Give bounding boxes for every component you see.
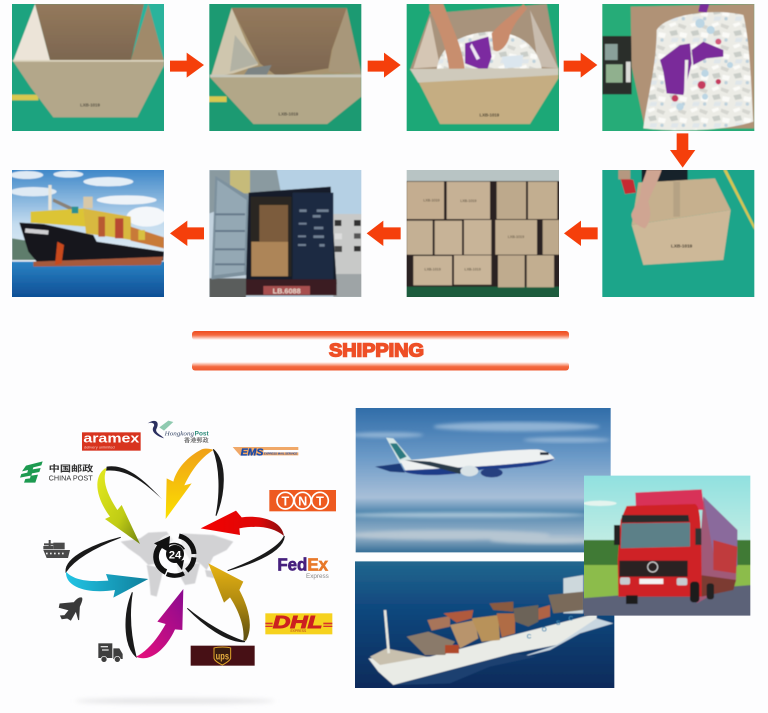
photo: full carton beside scale: [602, 4, 754, 131]
logo: Aramex: [82, 432, 141, 451]
logo: TNT: T: [281, 494, 289, 508]
logo: Hongkong Post: [148, 421, 209, 444]
photo: stacked cartons on pallet: LXB-1019: [460, 199, 476, 203]
icon: 24 hour clock: [154, 533, 195, 576]
arrow: gold: [166, 449, 223, 519]
banner title: SHIPPING: [329, 340, 424, 360]
logo: EMS: [233, 447, 298, 458]
heading: shipping banner: [192, 331, 569, 370]
photo: taping sealed carton: [602, 170, 754, 297]
world map: [121, 532, 233, 597]
icon: truck: [98, 643, 123, 662]
arrow: lime: [97, 466, 162, 544]
logo: Hongkong Post: Post: [195, 431, 209, 438]
photo: stacked cartons on pallet: LXB-1019: [423, 199, 440, 203]
logo: Aramex: aramex: [83, 432, 139, 446]
photo: taping sealed carton: LXB-1019: [671, 243, 693, 248]
photo: container ship: C: [527, 633, 532, 640]
icon: ship: [43, 540, 70, 558]
photo: container ship: [355, 561, 614, 688]
icon: 24 hour clock: 24: [169, 549, 182, 561]
arrow: step 3 to 4: [564, 53, 597, 78]
logo: UPS: ups: [216, 652, 229, 663]
logo: EMS: EMS: [241, 447, 264, 458]
logo: Hongkong Post: 香港郵政: [184, 436, 209, 444]
logo: EMS: EXPRESS MAIL SERVICE: [264, 452, 297, 456]
arrow: step 4 to 5: [670, 133, 695, 168]
arrow: step 2 to 3: [368, 53, 401, 78]
logo: DHL: [265, 612, 332, 634]
photo: filling carton by hand: [406, 4, 559, 131]
photo: container ship: C: [568, 616, 573, 623]
photo: carton with plastic liner: [209, 4, 362, 131]
group: photos right side: [405, 2, 757, 300]
photo: loaded shipping container: [209, 170, 362, 297]
logo: TNT: T: [316, 494, 324, 508]
ground shadow: [75, 698, 275, 704]
arrow: step 1 to 2: [170, 53, 204, 78]
photo: stacked cartons on pallet: [406, 170, 559, 297]
arrow: step 7 to 8: [170, 221, 204, 246]
logo: China Post: CHINA POST: [49, 474, 93, 483]
logo: China Post: 中国邮政: [49, 462, 94, 473]
logo: FedEx: Fed: [277, 555, 307, 575]
icon: plane: [59, 598, 82, 620]
photo: loaded shipping container: LB.6088: [273, 286, 301, 295]
banner top bar: [192, 331, 569, 340]
logo: FedEx: [277, 555, 329, 580]
photo: airplane: [356, 408, 611, 552]
logo: China Post: [20, 461, 94, 483]
logo: DHL: DHL: [273, 612, 322, 632]
arrow: magenta: [126, 589, 183, 658]
group: photos left side: [10, 2, 401, 300]
photo: empty carton: LXB-1019: [80, 102, 100, 107]
photo: filling carton by hand: LXB-1019: [479, 112, 500, 117]
logo: FedEx: Express: [306, 573, 329, 580]
arrow: olive: [187, 563, 250, 642]
photo: stacked cartons on pallet: LXB-1019: [465, 268, 481, 272]
photo: container ship: O: [542, 627, 547, 634]
photo: red truck: [584, 476, 750, 616]
panel: packing process photos: [10, 2, 757, 300]
diagram: global courier network: [20, 421, 336, 704]
logo: FedEx: Ex: [307, 555, 328, 575]
logo: TNT: N: [298, 494, 307, 508]
logo: Aramex: delivery unlimited: [84, 445, 115, 450]
logo: UPS: [191, 646, 255, 666]
logo: Hongkong Post: Hongkong: [164, 431, 195, 438]
logo: DHL: EXPRESS: [290, 629, 307, 633]
photo: cargo ship at sea: [12, 170, 164, 297]
arrow: step 5 to 6: [564, 221, 598, 246]
logo: TNT: [269, 490, 336, 511]
panel: transport photos: [347, 407, 752, 690]
photo: empty carton: [12, 4, 164, 131]
arrow: cyan: [66, 537, 148, 598]
photo: carton with plastic liner: LXB-1019: [278, 111, 299, 116]
arrow: red: [201, 511, 284, 571]
photo: stacked cartons on pallet: LXB-1019: [508, 235, 524, 239]
banner bottom bar: [192, 362, 569, 370]
photo: stacked cartons on pallet: LXB-1019: [425, 268, 441, 272]
arrow: step 6 to 7: [367, 221, 401, 246]
photo: container ship: S: [556, 620, 561, 627]
